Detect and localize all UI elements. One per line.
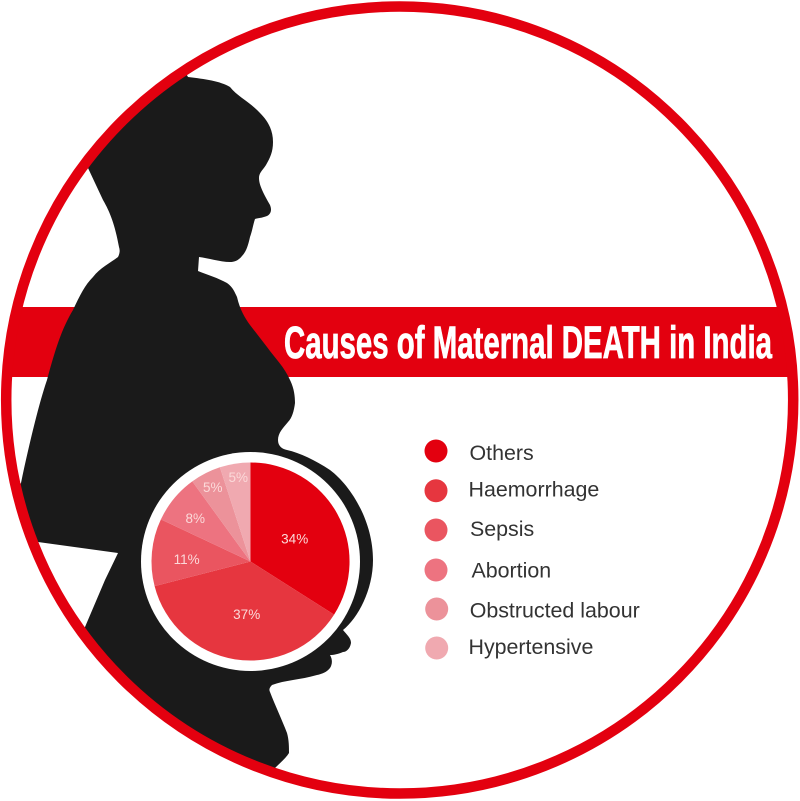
pie percentage labels: 5% — [203, 480, 222, 495]
legend item: abortion: Abortion — [472, 559, 551, 583]
legend item: obstructed labour: Obstructed labour — [470, 599, 640, 623]
legend — [424, 440, 640, 660]
slice: abortion 8% — [161, 481, 250, 562]
red title band — [6, 307, 794, 377]
slice: haemorrhage 37% — [155, 562, 334, 661]
legend item: others — [424, 440, 534, 465]
pie white border — [141, 452, 360, 671]
legend item: abortion — [424, 558, 551, 583]
legend item: haemorrhage: Haemorrhage — [468, 478, 599, 502]
legend item: sepsis: Sepsis — [470, 517, 534, 541]
legend item: hypertensive: Hypertensive — [468, 635, 593, 659]
pie percentage labels: 34% — [281, 532, 308, 546]
pie chart — [141, 452, 360, 671]
pie percentage labels: 8% — [186, 511, 205, 526]
pie percentage labels: 11% — [174, 552, 200, 567]
slice: sepsis 11% — [151, 519, 250, 586]
pie percentage labels: 5% — [229, 470, 248, 485]
legend item: others: Others — [470, 441, 534, 465]
pie percentage labels: 37% — [233, 607, 260, 622]
slice: hypertensive 5% — [220, 462, 250, 562]
pie percentage labels — [174, 470, 308, 622]
pregnant woman silhouette — [20, 75, 373, 768]
legend item: sepsis — [424, 517, 534, 542]
slice: obstructed labour 5% — [192, 467, 250, 562]
slice: others 34% — [250, 462, 350, 615]
